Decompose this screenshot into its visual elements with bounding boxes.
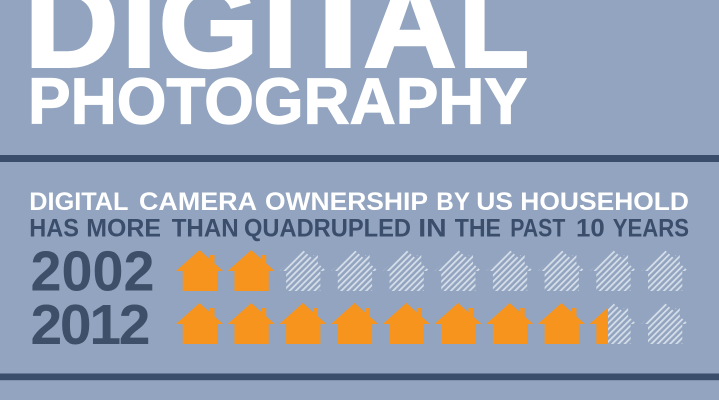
year label 2002: 2002: [30, 240, 154, 304]
top divider: [0, 155, 719, 162]
headline: PAST: [510, 214, 565, 242]
headline: THE: [455, 214, 501, 242]
headline: US: [476, 188, 513, 216]
headline: DIGITAL: [29, 188, 128, 216]
title: [24, 0, 529, 138]
headline: HAS: [29, 214, 79, 242]
headline: IN: [418, 214, 447, 242]
house row 2012: [176, 303, 688, 344]
headline: MORE: [86, 214, 161, 242]
bottom divider: [0, 374, 719, 380]
headline: YEARS: [613, 214, 689, 242]
headline: [29, 188, 689, 242]
title: PHOTOGRAPHY: [28, 65, 527, 138]
headline: CAMERA: [139, 188, 257, 216]
headline: OWNERSHIP: [265, 188, 428, 216]
headline: HOUSEHOLD: [520, 188, 689, 216]
headline: THAN: [172, 214, 239, 242]
headline: BY: [436, 188, 470, 216]
headline: QUADRUPLED: [244, 214, 411, 242]
year label 2012: 2012: [30, 293, 150, 357]
house row 2002: [176, 250, 688, 291]
headline: 10: [576, 214, 605, 242]
